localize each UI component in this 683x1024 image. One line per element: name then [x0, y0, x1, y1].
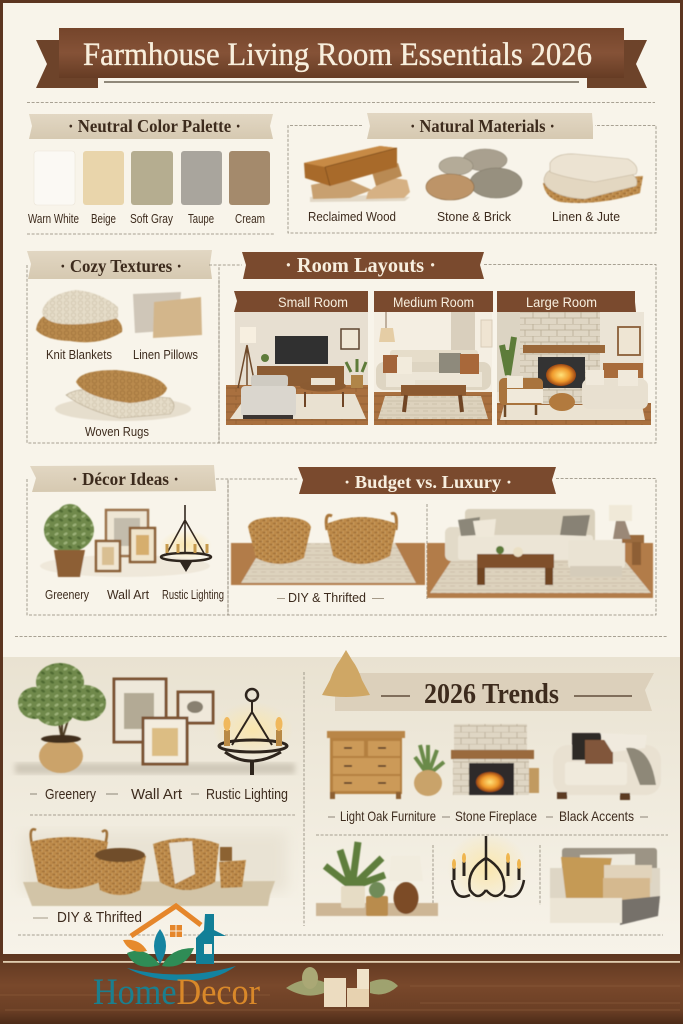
swatch labels: Cream	[235, 212, 265, 226]
large room header: Large Room	[526, 294, 597, 310]
heading: natural materials	[367, 113, 593, 139]
heading: room layouts	[242, 252, 484, 279]
icon: framed wall art	[114, 679, 213, 764]
decor labels: Wall Art	[107, 588, 150, 602]
icon: linen pillows	[133, 292, 202, 338]
decor labels: Greenery	[45, 588, 90, 602]
heading: budget vs luxury: · Budget vs. Luxury ·	[344, 472, 512, 492]
panel: cozy textures	[27, 250, 219, 443]
lower left labels	[30, 787, 288, 803]
lower left labels: Rustic Lighting	[206, 787, 288, 803]
heading: decor ideas	[30, 465, 216, 492]
knit and pillow labels: Linen Pillows	[133, 348, 198, 362]
swatch labels: Beige	[91, 212, 116, 226]
heading: cozy textures	[27, 250, 212, 279]
icon: woven baskets	[30, 829, 246, 895]
swatch labels	[28, 212, 265, 226]
panel: budget vs luxury	[216, 467, 656, 615]
panel: room layouts	[209, 252, 656, 443]
budget baskets and rug	[231, 513, 425, 585]
trend labels	[328, 808, 648, 824]
icon: wall sconce	[213, 689, 293, 775]
icon: armchair	[553, 733, 661, 800]
title banner	[36, 28, 647, 88]
panel: diy and thrifted baskets	[23, 829, 275, 926]
knit and pillow labels	[46, 348, 198, 362]
icon: potted plant	[414, 745, 444, 796]
budget caption: DIY & Thrifted	[288, 591, 366, 605]
panel: greenery, wall art, lighting	[15, 663, 295, 803]
icon: oak dresser	[327, 731, 405, 799]
basket ground	[23, 881, 275, 906]
icon: linen and jute	[543, 154, 643, 203]
panel: decor ideas	[27, 465, 228, 615]
woven rugs label: Woven Rugs	[85, 425, 149, 439]
heading: room layouts: · Room Layouts ·	[285, 253, 436, 277]
heading: cozy textures: · Cozy Textures ·	[60, 256, 182, 276]
heading: decor ideas: · Décor Ideas ·	[72, 469, 179, 489]
icon: rustic lighting	[160, 505, 212, 572]
material labels: Linen & Jute	[552, 210, 620, 224]
icon: tree in pot	[18, 663, 106, 773]
trend labels: Light Oak Furniture	[340, 808, 436, 824]
icon: knit blankets	[36, 290, 122, 342]
heading: budget vs luxury	[298, 467, 556, 494]
small room header: Small Room	[278, 294, 348, 310]
trend labels: Stone Fireplace	[455, 808, 537, 824]
swatches	[34, 151, 270, 205]
heading: 2026 trends ribbon: 2026 Trends	[424, 679, 559, 710]
panel: natural materials	[288, 113, 656, 233]
footer wood band	[0, 954, 683, 1024]
diy caption: DIY & Thrifted	[57, 910, 142, 926]
large room header	[497, 291, 636, 312]
lower left labels: Greenery	[45, 787, 97, 803]
title text: Farmhouse Living Room Essentials 2026	[83, 37, 592, 73]
logo house	[123, 906, 236, 981]
heading: neutral color palette: · Neutral Color Palette ·	[68, 116, 241, 136]
small room header	[234, 291, 368, 312]
room: small	[226, 291, 368, 425]
icon: stone and brick	[426, 149, 522, 200]
decor labels	[45, 588, 224, 602]
room: large	[497, 291, 651, 425]
lower left labels: Wall Art	[131, 787, 182, 803]
icon: wall art	[96, 510, 155, 571]
icon: greenery	[40, 504, 210, 577]
second-row accent icons	[316, 832, 660, 925]
material labels: Stone & Brick	[437, 210, 512, 224]
heading: natural materials: · Natural Materials ·	[410, 116, 555, 136]
panel: lower section background	[3, 657, 680, 954]
icon: woven rugs	[55, 370, 191, 421]
icon: reclaimed wood	[304, 146, 410, 202]
heading: neutral color palette	[29, 114, 273, 139]
icon: stone fireplace	[451, 724, 539, 795]
luxury sectional room	[427, 505, 653, 598]
medium room header: Medium Room	[393, 294, 474, 310]
logo: HomeDecor	[93, 906, 260, 1013]
panel: 2026 trends	[316, 650, 661, 925]
material labels: Reclaimed Wood	[308, 210, 396, 224]
decor labels: Rustic Lighting	[162, 588, 224, 602]
icon: bed with pillows and throw	[550, 848, 660, 925]
trend labels: Black Accents	[559, 808, 634, 824]
logo wordmark: HomeDecor	[93, 972, 260, 1013]
panel: neutral color palette	[27, 114, 274, 234]
room: medium	[374, 291, 493, 425]
knit and pillow labels: Knit Blankets	[46, 348, 112, 362]
swatch labels: Warn White	[28, 212, 79, 226]
swatch labels: Soft Gray	[130, 212, 174, 226]
icon: black chandelier	[447, 832, 527, 904]
material labels	[308, 210, 620, 224]
icon: plant and lamp	[316, 842, 438, 916]
footer emblem	[286, 967, 398, 1007]
swatch labels: Taupe	[188, 212, 214, 226]
icon: pendant lamp	[322, 650, 370, 697]
heading: 2026 trends ribbon	[335, 673, 654, 711]
